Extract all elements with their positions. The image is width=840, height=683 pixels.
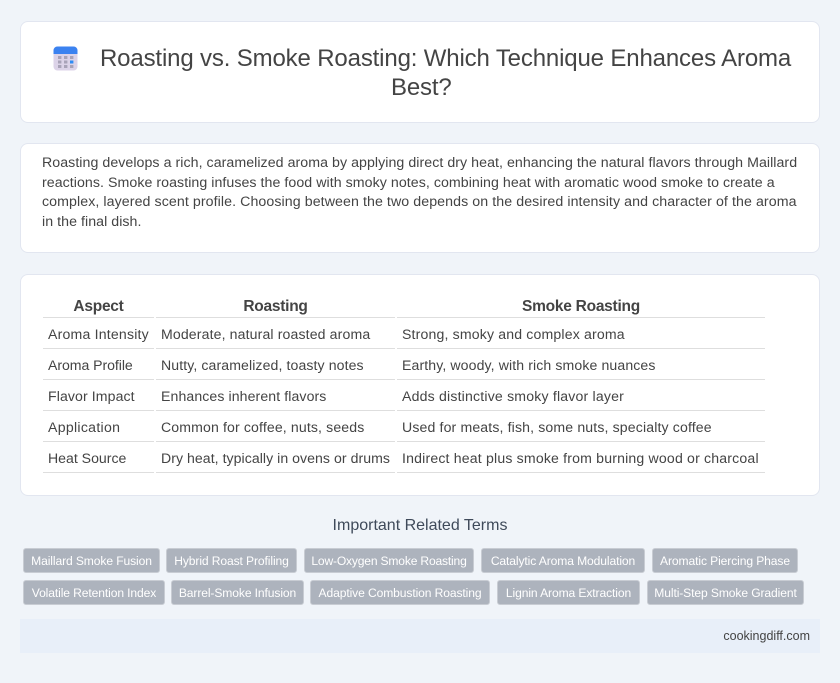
tags: related terms [23,548,804,605]
tag [166,548,297,573]
table header: Aspect [73,298,124,315]
row: flavor impact: Adds distinctive smoky flavor layer [402,388,624,404]
row: aroma intensity: Strong, smoky and complex aroma [402,326,625,342]
tag [23,548,160,573]
footer source: cookingdiff.com [723,629,810,643]
row: application: Application [48,419,120,435]
row: aroma intensity: Aroma Intensity [48,326,149,342]
tag [497,580,640,605]
footer [20,619,820,653]
panel: title card [20,21,820,123]
tag [647,580,804,605]
title: Best? [391,74,452,101]
row: heat source: Dry heat, typically in ovens or drums [161,450,390,466]
icon: calendar [54,46,78,70]
tag: Catalytic Aroma Modulation [491,554,635,568]
tag [481,548,645,573]
tag: Lignin Aroma Extraction [506,586,631,600]
tag: Volatile Retention Index [32,586,156,600]
row: flavor impact: Enhances inherent flavors [161,388,326,404]
row: aroma profile: Earthy, woody, with rich smoke nuances [402,357,656,373]
row: aroma intensity: Moderate, natural roasted aroma [161,326,370,342]
tag: Low-Oxygen Smoke Roasting [311,554,467,568]
panel: summary paragraph [20,143,820,253]
tag [652,548,798,573]
row: flavor impact [48,388,624,404]
table header [73,298,640,315]
row: aroma profile [48,357,656,373]
table header: Roasting [243,298,308,315]
text block: summary: reactions. Smoke roasting infuses the food with smoky notes, combining heat with aromatic wood smoke to create a [42,174,775,190]
row: heat source: Heat Source [48,450,126,466]
text block: summary: complex, layered scent profile. Choosing between the two depends on the desired intensity and character of the aroma [42,194,797,210]
heading: related terms: Important Related Terms [333,517,507,534]
row: application: Common for coffee, nuts, seeds [161,419,364,435]
tag [23,580,165,605]
tag: Aromatic Piercing Phase [660,554,790,568]
row: aroma intensity [48,326,625,342]
row: aroma profile: Aroma Profile [48,357,133,373]
text block: summary [42,155,797,230]
comparison table [43,298,765,473]
tag [310,580,490,605]
panel: comparison table [20,274,820,496]
tag [304,548,474,573]
row: application [48,419,712,435]
tag: Adaptive Combustion Roasting [319,586,481,600]
text block: summary: in the final dish. [42,214,142,230]
tag: Hybrid Roast Profiling [174,554,289,568]
tag [171,580,304,605]
title [100,45,792,101]
row: heat source [48,450,759,466]
title: Roasting vs. Smoke Roasting: Which Technique Enhances Aroma [100,45,791,72]
row: heat source: Indirect heat plus smoke from burning wood or charcoal [402,450,759,466]
tag: Barrel-Smoke Infusion [179,586,296,600]
tag: Maillard Smoke Fusion [31,554,152,568]
row: aroma profile: Nutty, caramelized, toasty notes [161,357,364,373]
tag: Multi-Step Smoke Gradient [654,586,797,600]
text block: summary: Roasting develops a rich, caramelized aroma by applying direct dry heat, enhancing the natural flavors through Maillard [42,155,797,171]
table header: Smoke Roasting [522,298,640,315]
row: flavor impact: Flavor Impact [48,388,135,404]
row: application: Used for meats, fish, some nuts, specialty coffee [402,419,712,435]
